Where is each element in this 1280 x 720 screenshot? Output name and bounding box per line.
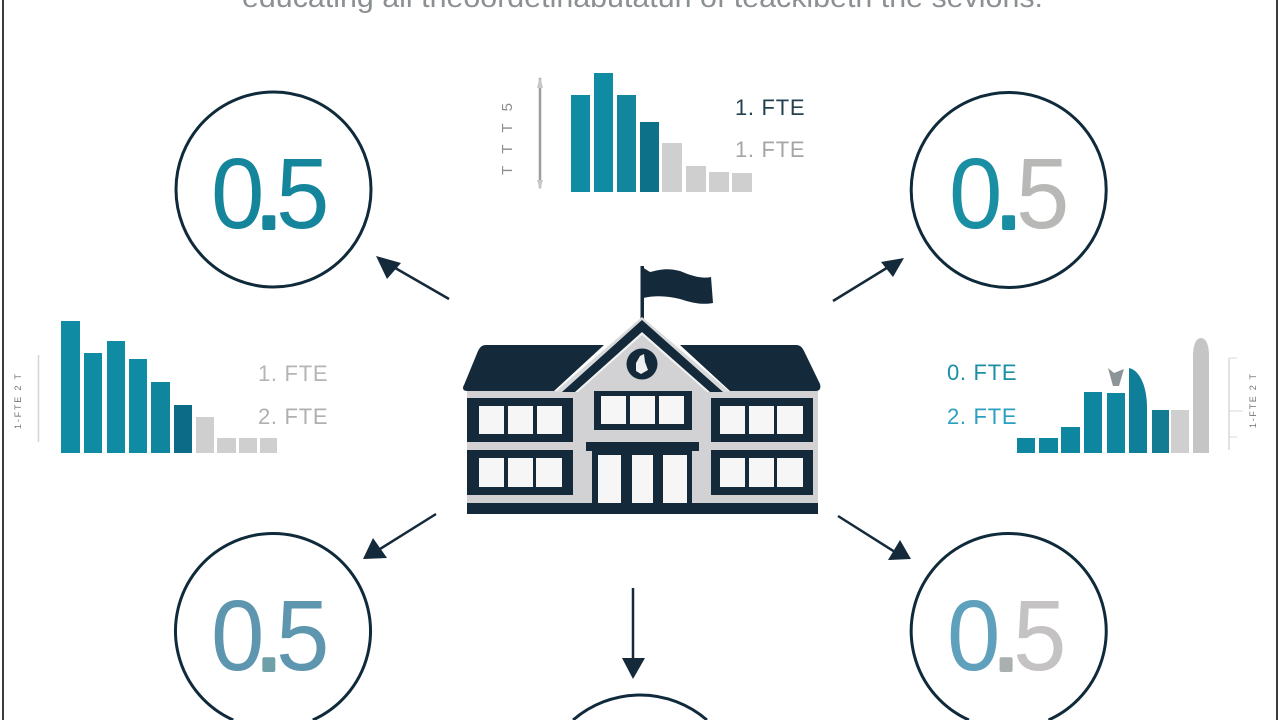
axis: right chart: 1-FTE 2 T	[1248, 374, 1258, 428]
axis: left chart: 1-FTE 2 T	[13, 374, 23, 429]
label: right chart second: 2. FTE	[947, 404, 1017, 429]
value: top-right 0.5: 5	[1016, 137, 1069, 249]
icon: small grey mark	[1108, 368, 1124, 386]
value: bottom-right 0.5: .	[993, 579, 1019, 691]
window: upper right	[711, 398, 813, 442]
arrow: to bottom-right	[838, 516, 911, 560]
right roof	[680, 345, 820, 391]
window: lower right	[711, 450, 813, 495]
axis: top chart: TTT5	[499, 103, 516, 175]
value: top-right 0.5: 0	[949, 137, 1002, 249]
label: top chart first: 1. FTE	[735, 95, 805, 120]
window: upper centre	[594, 391, 692, 430]
label: right chart first: 0. FTE	[947, 360, 1017, 385]
entrance	[586, 442, 699, 504]
left roof	[463, 345, 604, 391]
bar chart: left	[13, 321, 328, 453]
panel: top-left value circle	[176, 92, 371, 287]
axis: right chart	[1229, 358, 1258, 450]
axis: top chart	[499, 76, 543, 190]
value: top-left 0.5: .	[256, 137, 282, 249]
base	[467, 503, 818, 514]
value: top-right 0.5: .	[995, 137, 1022, 249]
arrow: to bottom-left	[363, 514, 436, 559]
arrow: to top-left	[376, 256, 449, 299]
value: bottom-left 0.5: .	[256, 579, 282, 691]
window: upper left	[467, 398, 573, 442]
building body	[467, 391, 818, 504]
panel: bottom-left value circle	[175, 533, 370, 720]
label: top chart second: 1. FTE	[735, 137, 805, 162]
value: top-left 0.5: 0	[211, 137, 264, 249]
bar chart: top	[499, 73, 805, 192]
arrow: down to bottom circle	[622, 588, 645, 679]
emblem	[626, 348, 658, 380]
value: bottom-right 0.5: 5	[1013, 579, 1066, 691]
gable	[555, 317, 730, 392]
label: left chart second: 2. FTE	[258, 404, 328, 429]
value: top-left 0.5: 5	[276, 137, 329, 249]
window: lower left	[467, 450, 573, 495]
arrow: to top-right	[833, 258, 904, 301]
value: bottom-left 0.5: 5	[276, 579, 329, 691]
axis: left chart	[13, 355, 38, 442]
panel: bottom centre circle, clipped	[573, 695, 707, 720]
bar chart: right	[947, 338, 1258, 453]
value: bottom-left 0.5: 0	[211, 579, 264, 691]
icon: school building	[463, 266, 820, 514]
flag	[640, 266, 713, 322]
value: bottom-right 0.5: 0	[947, 579, 1000, 691]
panel: bottom-right value circle	[911, 533, 1106, 720]
panel: top-right value circle	[911, 92, 1106, 288]
label: left chart first: 1. FTE	[258, 361, 328, 386]
